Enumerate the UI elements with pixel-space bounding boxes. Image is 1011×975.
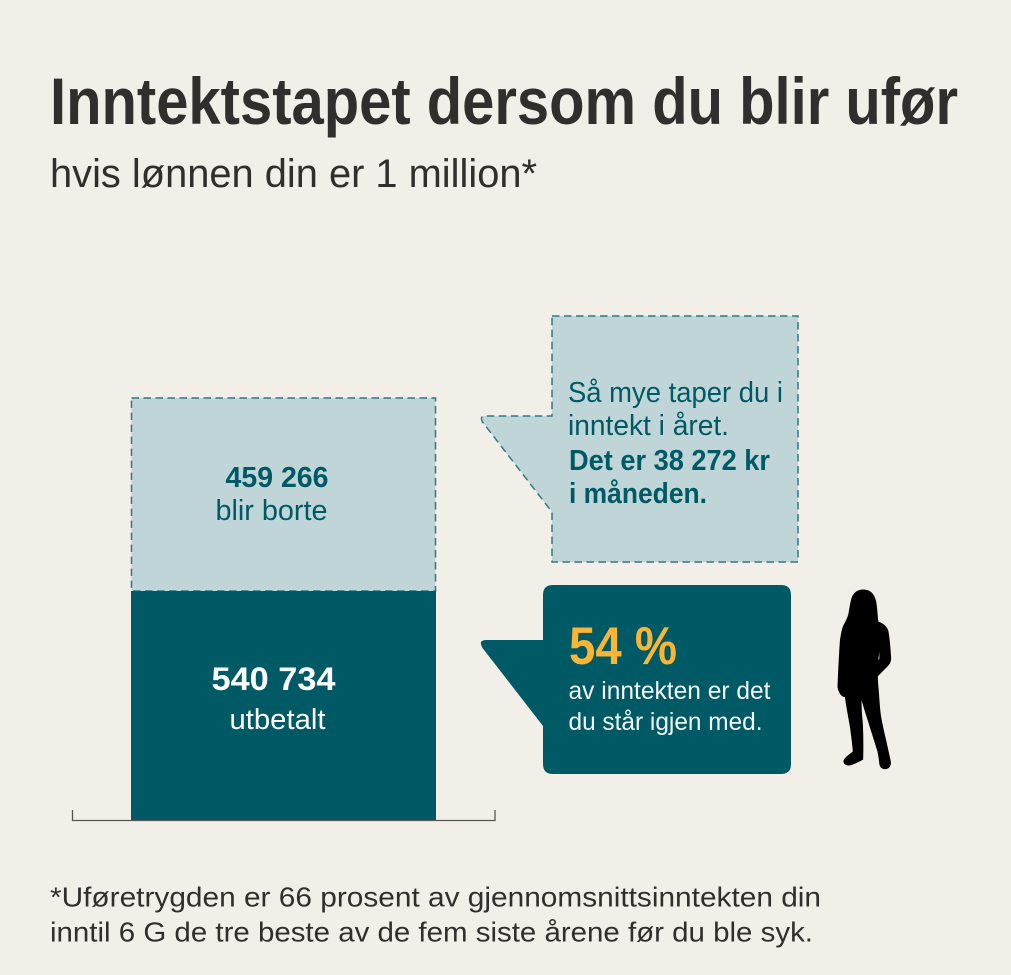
footnote: inntil 6 G de tre beste av de fem siste årene før du ble syk.	[50, 916, 813, 948]
bar segment: lost income: 459 266	[226, 462, 328, 494]
baseline axis	[72, 810, 495, 820]
bar segment: lost income	[132, 398, 436, 591]
callout: annual loss: Så mye taper du i	[568, 377, 783, 409]
callout: remaining income	[481, 585, 791, 774]
icon: person silhouette	[838, 590, 891, 769]
callout: annual loss: i måneden.	[569, 478, 707, 510]
footnote	[50, 882, 821, 948]
stacked bar chart	[72, 398, 495, 820]
bar segment: paid out	[131, 591, 436, 820]
footnote: *Uføretrygden er 66 prosent av gjennomsnittsinntekten din	[50, 882, 821, 912]
callout: annual loss: inntekt i året.	[568, 410, 729, 442]
subtitle: hvis lønnen din er 1 million*	[50, 152, 537, 196]
callout: annual loss: Det er 38 272 kr	[569, 445, 770, 477]
callout: annual loss	[481, 316, 798, 562]
callout: remaining income: av inntekten er det	[568, 677, 771, 705]
callout: remaining income: du står igjen med.	[568, 708, 762, 736]
callout: remaining income: 54 %	[569, 617, 677, 676]
bar segment: lost income: blir borte	[216, 495, 328, 527]
bar segment: paid out: utbetalt	[230, 704, 326, 736]
bar segment: paid out: 540 734	[212, 661, 336, 697]
